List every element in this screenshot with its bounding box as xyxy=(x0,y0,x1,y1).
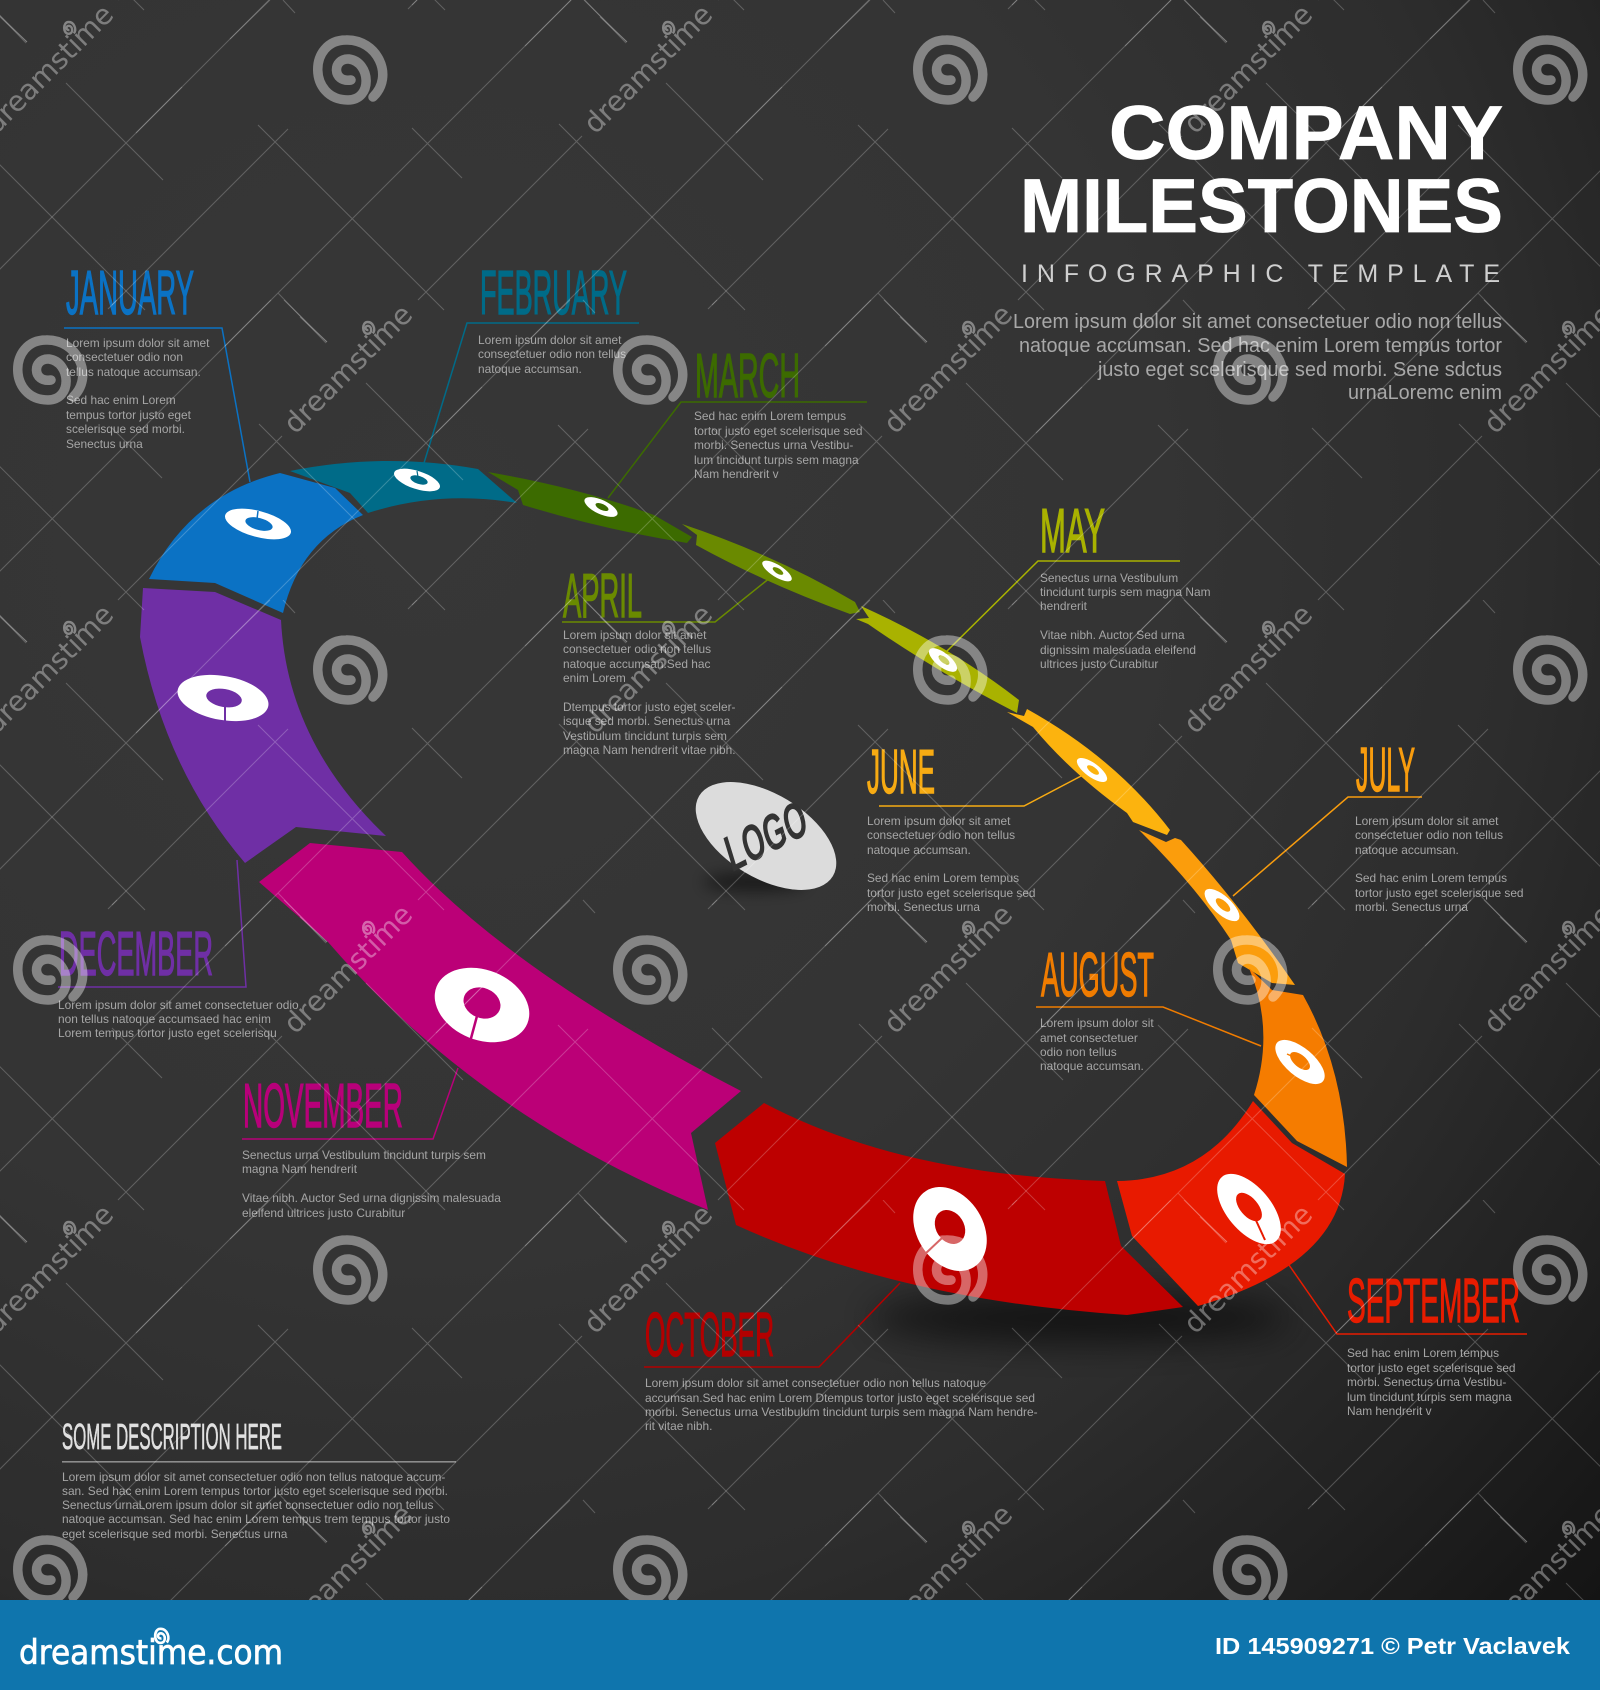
segment: August xyxy=(1249,968,1347,1167)
description block: san. Sed hac enim Lorem tempus tortor justo eget scelerisque sed morbi. xyxy=(62,1484,448,1498)
label: April xyxy=(562,562,771,757)
label: February: natoque accumsan. xyxy=(478,362,582,376)
segment: April xyxy=(682,524,860,614)
label: March: lum tincidunt turpis sem magna xyxy=(694,453,859,467)
label: June xyxy=(867,738,1083,914)
label: June: JUNE xyxy=(867,738,935,807)
segment: May xyxy=(856,606,1019,713)
label: September: morbi. Senectus urna Vestibu- xyxy=(1347,1375,1506,1389)
label: May: ultrices justo Curabitur xyxy=(1040,657,1158,671)
label: August: AUGUST xyxy=(1041,941,1154,1010)
label: April: Dtempus tortor justo eget sceler- xyxy=(563,700,736,714)
label: October: OCTOBER xyxy=(645,1301,774,1370)
label: December: non tellus natoque accumsaed hac enim xyxy=(58,1012,271,1026)
timeline ribbon xyxy=(140,461,1347,1315)
label: July: tortor justo eget scelerisque sed xyxy=(1355,886,1524,900)
icon: December ring xyxy=(174,668,272,728)
label: April: enim Lorem xyxy=(563,671,626,685)
label: July xyxy=(1233,736,1524,914)
label: July: consectetuer odio non tellus xyxy=(1355,828,1503,842)
title block: natoque accumsan. Sed hac enim Lorem tempus tortor xyxy=(1019,335,1502,357)
segment: February xyxy=(290,461,517,513)
label: January: Senectus urna xyxy=(66,437,143,451)
drop shadow under timeline ribbon xyxy=(870,1294,1290,1342)
label: January: JANUARY xyxy=(66,259,194,328)
label: March: Nam hendrerit v xyxy=(694,467,779,481)
icon: May ring xyxy=(925,644,961,676)
icon: October ring xyxy=(898,1173,1002,1285)
label: January: tellus natoque accumsan. xyxy=(66,365,201,379)
description block xyxy=(62,1416,456,1541)
label: September xyxy=(1289,1265,1527,1418)
label: January: scelerisque sed morbi. xyxy=(66,422,185,436)
label: November: Senectus urna Vestibulum tincidunt turpis sem xyxy=(242,1148,486,1162)
icon: July ring xyxy=(1200,884,1244,926)
label: June: tortor justo eget scelerisque sed xyxy=(867,886,1036,900)
label: January: Sed hac enim Lorem xyxy=(66,393,176,407)
label: October: accumsan.Sed hac enim Lorem Dtempus tortor justo eget scelerisque sed xyxy=(645,1391,1035,1405)
label: July: Sed hac enim Lorem tempus xyxy=(1355,871,1507,885)
title block: urnaLoremc enim xyxy=(1348,382,1502,404)
text: FEBRUARY xyxy=(480,259,627,328)
icon: March ring xyxy=(582,493,620,521)
label: November: Vitae nibh. Auctor Sed urna dignissim malesuada xyxy=(242,1191,501,1205)
label: April: Lorem ipsum dolor sit amet xyxy=(563,628,707,642)
label: November xyxy=(242,1068,501,1220)
description block: Lorem ipsum dolor sit amet consectetuer odio non tellus natoque accum- xyxy=(62,1470,445,1484)
label: March: MARCH xyxy=(695,342,800,411)
label: December xyxy=(58,860,299,1040)
icon: January ring xyxy=(222,503,294,545)
label: October xyxy=(644,1283,1038,1433)
segment: March xyxy=(488,472,692,543)
label: January xyxy=(64,259,250,482)
label: February: Lorem ipsum dolor sit amet xyxy=(478,333,622,347)
label: April: consectetuer odio non tellus xyxy=(563,642,711,656)
label: May: dignissim malesuada eleifend xyxy=(1040,643,1196,657)
label: February: consectetuer odio non tellus xyxy=(478,347,626,361)
label: September: Nam hendrerit v xyxy=(1347,1404,1432,1418)
label: November: eleifend ultrices justo Curabitur xyxy=(242,1206,405,1220)
icon: February ring xyxy=(391,464,443,496)
label: July: Lorem ipsum dolor sit amet xyxy=(1355,814,1499,828)
title block: COMPANY xyxy=(1109,91,1503,176)
icon: June ring xyxy=(1073,754,1111,786)
label: April: natoque accumsan.Sed hac xyxy=(563,657,710,671)
label: May: MAY xyxy=(1040,497,1105,566)
label: August xyxy=(1036,941,1261,1073)
description block: SOME DESCRIPTION HERE xyxy=(62,1416,282,1457)
description block: Senectus urnaLorem ipsum dolor sit amet consectetuer odio non tellus xyxy=(62,1498,434,1512)
label: March: tortor justo eget scelerisque sed xyxy=(694,424,863,438)
segment: November xyxy=(259,843,741,1210)
label: March: morbi. Senectus urna Vestibu- xyxy=(694,438,853,452)
label: August: amet consectetuer xyxy=(1040,1031,1138,1045)
label: April: APRIL xyxy=(563,562,642,631)
segment: October xyxy=(715,1103,1183,1315)
label: March xyxy=(608,342,867,498)
month ring icons xyxy=(174,464,1332,1285)
label: February xyxy=(424,259,639,463)
label: January: Lorem ipsum dolor sit amet xyxy=(66,336,210,350)
label: May: tincidunt turpis sem magna Nam xyxy=(1040,585,1211,599)
logo badge: LOGO xyxy=(718,788,813,883)
label: September: tortor justo eget scelerisque sed xyxy=(1347,1361,1516,1375)
label: May: Vitae nibh. Auctor Sed urna xyxy=(1040,628,1185,642)
label: January: consectetuer odio non xyxy=(66,350,183,364)
label: September: lum tincidunt turpis sem magna xyxy=(1347,1390,1512,1404)
label: October: morbi. Senectus urna Vestibulum tincidunt turpis sem magna Nam hendre- xyxy=(645,1405,1038,1419)
label: June: Sed hac enim Lorem tempus xyxy=(867,871,1019,885)
label: November: NOVEMBER xyxy=(243,1072,403,1141)
label: June: Lorem ipsum dolor sit amet xyxy=(867,814,1011,828)
label: January: tempus tortor justo eget xyxy=(66,408,192,422)
icon: April ring xyxy=(759,557,795,585)
title block: MILESTONES xyxy=(1020,164,1503,249)
label: November: magna Nam hendrerit xyxy=(242,1162,358,1176)
label: April: magna Nam hendrerit vitae nibh. xyxy=(563,743,736,757)
segment: September xyxy=(1117,1101,1345,1306)
title block: justo eget scelerisque sed morbi. Sene sdctus xyxy=(1097,359,1502,381)
label: May xyxy=(945,497,1211,671)
icon: August ring xyxy=(1268,1032,1332,1092)
label: May: Senectus urna Vestibulum xyxy=(1040,571,1178,585)
segment: June xyxy=(1007,709,1170,835)
label: May: hendrerit xyxy=(1040,599,1088,613)
label: July: JULY xyxy=(1356,736,1415,805)
label: June: consectetuer odio non tellus xyxy=(867,828,1015,842)
icon: September ring xyxy=(1205,1163,1293,1255)
segment: July xyxy=(1139,830,1295,985)
icon: November ring xyxy=(423,954,541,1056)
label: August: Lorem ipsum dolor sit xyxy=(1040,1016,1154,1030)
label: July: morbi. Senectus urna xyxy=(1355,900,1468,914)
label: December: Lorem ipsum dolor sit amet consectetuer odio xyxy=(58,998,299,1012)
label: June: morbi. Senectus urna xyxy=(867,900,980,914)
logo badge xyxy=(678,760,854,912)
label: September: Sed hac enim Lorem tempus xyxy=(1347,1346,1499,1360)
label: October: rit vitae nibh. xyxy=(645,1419,712,1433)
label: December: DECEMBER xyxy=(59,920,213,989)
label: March: Sed hac enim Lorem tempus xyxy=(694,409,846,423)
footer bar xyxy=(0,1600,1600,1690)
label: July: natoque accumsan. xyxy=(1355,843,1459,857)
label: August: natoque accumsan. xyxy=(1040,1059,1144,1073)
segment: December xyxy=(140,588,386,863)
label: August: odio non tellus xyxy=(1040,1045,1117,1059)
label: December: Lorem tempus tortor justo eget scelerisqu xyxy=(58,1026,277,1040)
label: April: isque sed morbi. Senectus urna xyxy=(563,714,731,728)
description block: eget scelerisque sed morbi. Senectus urna xyxy=(62,1527,288,1541)
segment: January xyxy=(149,473,363,613)
label: October: Lorem ipsum dolor sit amet consectetuer odio non tellus natoque xyxy=(645,1376,986,1390)
label: June: natoque accumsan. xyxy=(867,843,971,857)
description block: natoque accumsan. Sed hac enim Lorem tempus trem tempus tortor justo xyxy=(62,1512,450,1526)
title block xyxy=(1013,91,1503,404)
title block: INFOGRAPHIC TEMPLATE xyxy=(1021,260,1500,288)
title block: Lorem ipsum dolor sit amet consectetuer odio non tellus xyxy=(1013,311,1502,333)
footer bar: dreamstime.com xyxy=(19,1633,283,1673)
label: April: Vestibulum tincidunt turpis sem xyxy=(563,729,727,743)
footer bar: ID 145909271 © Petr Vaclavek xyxy=(1215,1633,1570,1659)
